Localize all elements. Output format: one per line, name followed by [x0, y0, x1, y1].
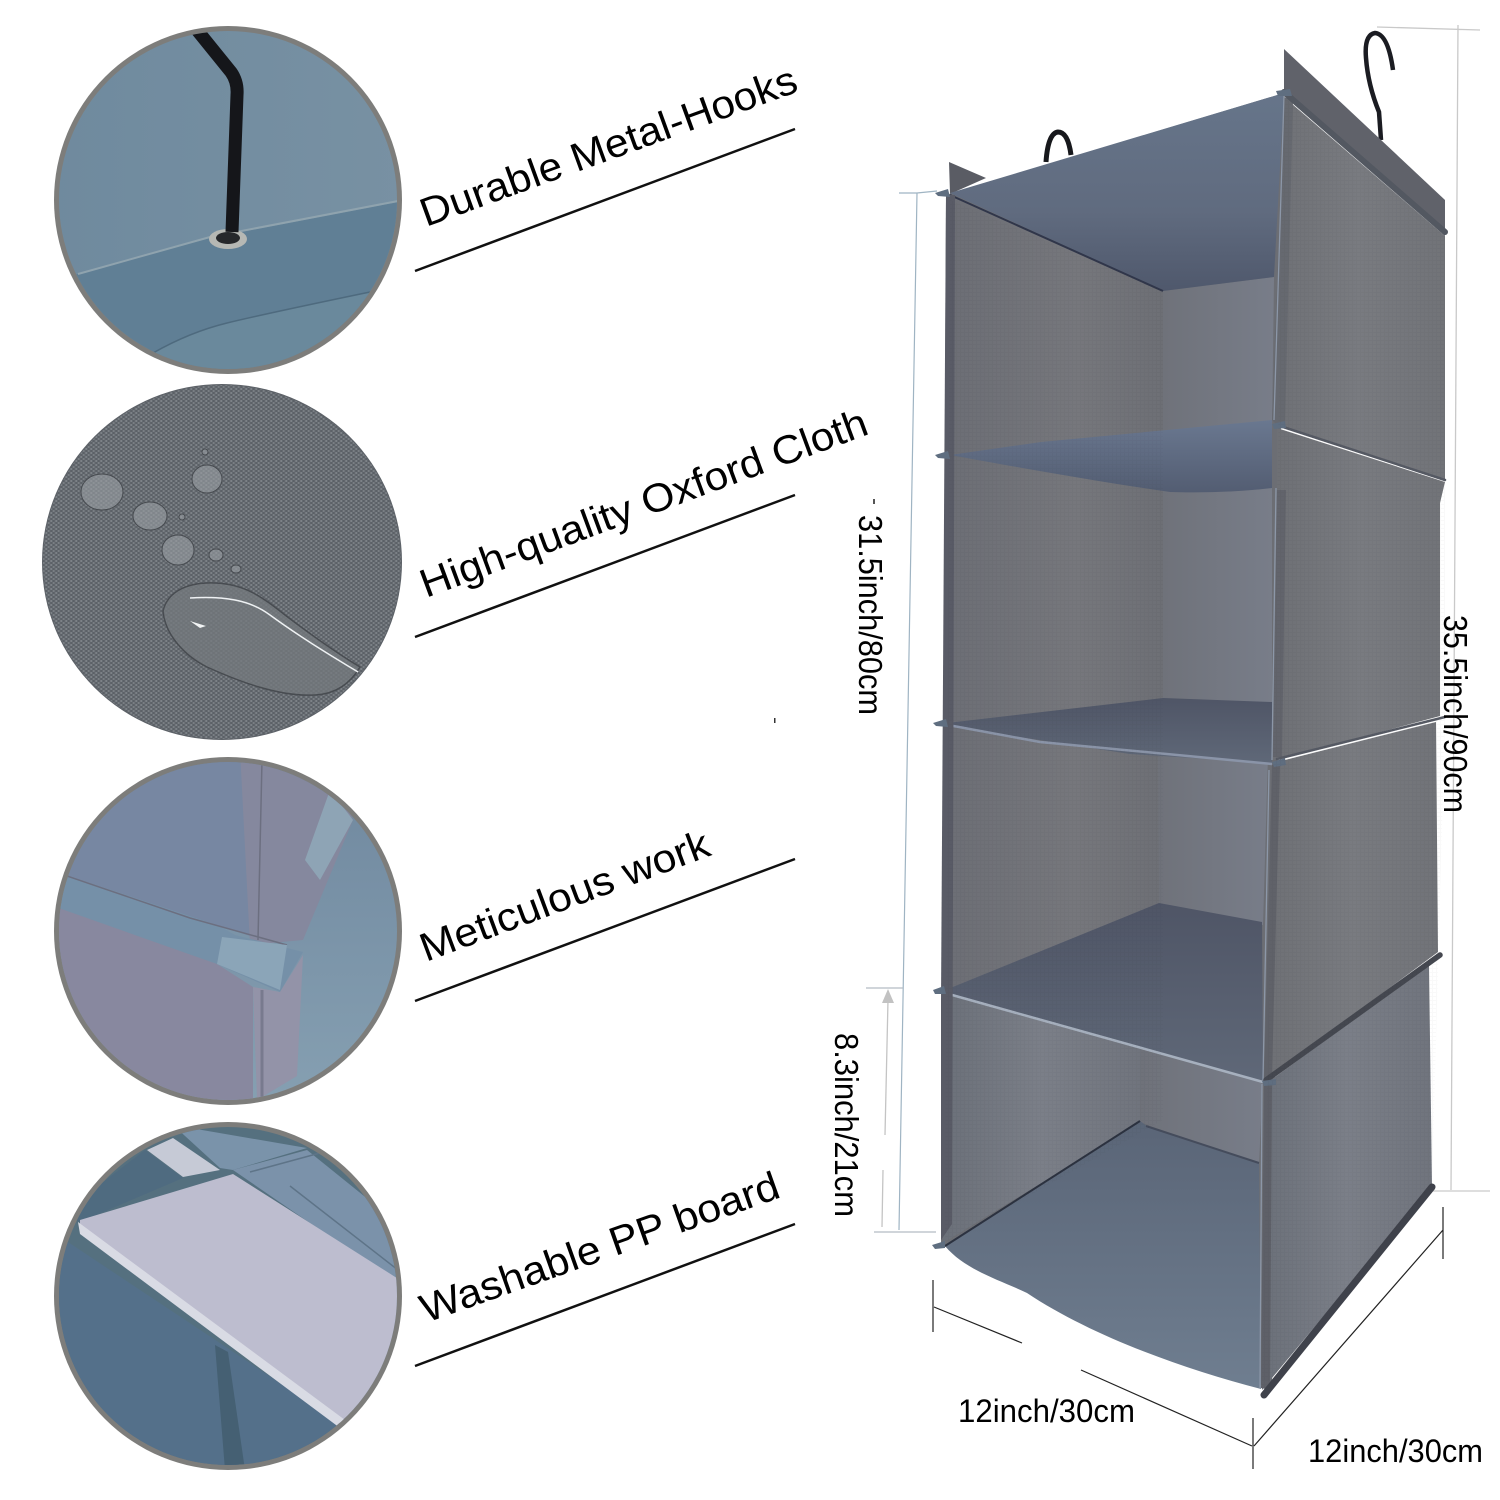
- dimension: 8.3 inch pocket height: 8.3inch/21cm: [828, 1033, 865, 1217]
- label: Meticulous work: Meticulous work: [414, 822, 717, 970]
- detail circle: oxford cloth water drops: [40, 380, 410, 745]
- dimension: bottom side depth: [1254, 1207, 1483, 1469]
- compartment 3: [944, 724, 1268, 992]
- rear tab: [949, 162, 986, 194]
- label: Washable PP board: Washable PP board: [414, 1164, 785, 1331]
- compartment 4: [943, 990, 1263, 1243]
- dimension: bottom front width: 12inch/30cm: [958, 1393, 1135, 1429]
- dimension: 8.3 inch pocket height: [828, 988, 936, 1232]
- board surface: [80, 1174, 400, 1423]
- icon: water droplets: [81, 449, 241, 573]
- icon: grommet: [209, 229, 247, 249]
- fabric mesh texture: [945, 97, 1445, 1390]
- label: Durable Metal-Hooks: Durable Metal-Hooks: [414, 58, 803, 235]
- detail circle: durable metal hook: [50, 20, 410, 380]
- label: Meticulous work: [414, 822, 795, 1001]
- detail circle: meticulous stitching: [50, 750, 410, 1110]
- icon: large water drop: [163, 583, 360, 695]
- stitched corner nubs: [932, 89, 1292, 1249]
- organizer product illustration: [932, 33, 1445, 1395]
- detail circle: washable PP board: [50, 1120, 410, 1475]
- dimension: 35.5 inch total height: [1377, 25, 1490, 1191]
- icon: metal hook wire: [197, 30, 237, 232]
- dimension: bottom side depth: 12inch/30cm: [1308, 1433, 1483, 1469]
- icon: small rear hook: [1046, 132, 1071, 162]
- shelf 2: [947, 698, 1272, 763]
- panel seams: [1264, 92, 1445, 1395]
- compartment 1: [950, 93, 1284, 458]
- left hem: [941, 195, 955, 1240]
- icon: large hook: [1366, 33, 1393, 140]
- right top tab: [1284, 49, 1445, 236]
- arrow head: [882, 989, 894, 1003]
- right outer panels: [1260, 96, 1445, 1390]
- shelf 3: [943, 903, 1263, 1081]
- dimension: bottom front width: [933, 1280, 1253, 1469]
- dimension: 31.5 inch height line: [774, 191, 937, 1230]
- dimension label: 35.5 inch: 35.5inch/90cm: [1437, 615, 1474, 813]
- dimension: 31.5 inch height line: 31.5inch/80cm: [852, 515, 889, 715]
- compartment 2: [948, 456, 1272, 724]
- body backing: [941, 93, 1284, 1390]
- label: High-quality Oxford Cloth: High-quality Oxford Cloth: [414, 401, 874, 606]
- shelf 1 underside: [950, 420, 1272, 492]
- floor: [945, 1121, 1261, 1389]
